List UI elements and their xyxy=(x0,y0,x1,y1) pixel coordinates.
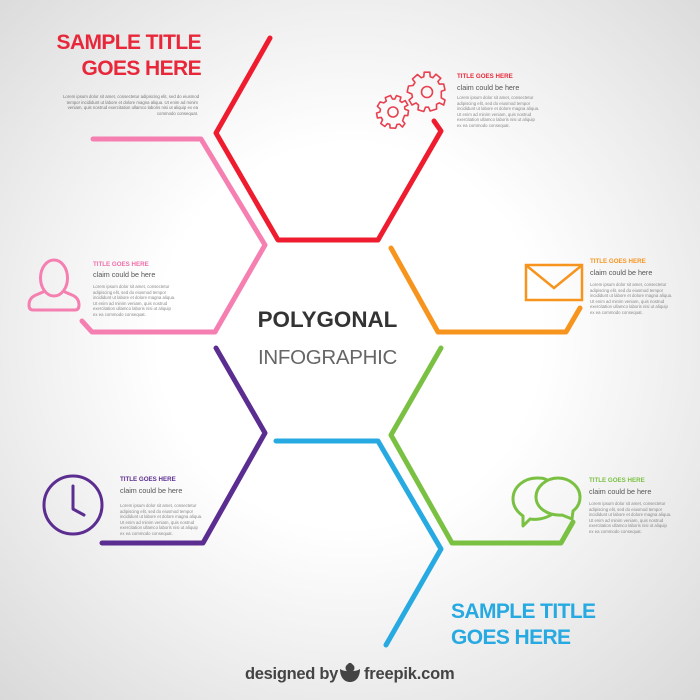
text: claim could be here xyxy=(590,268,652,277)
text: adipiscing elit, sed do eiusmod tempor xyxy=(457,101,530,106)
title: bottom right xyxy=(451,600,596,649)
text: claim could be here xyxy=(589,487,651,496)
text: Ut enim ad minim veniam, quis nostrud xyxy=(457,112,531,117)
text: incididunt ut labore et dolore magna aliqua. xyxy=(93,295,175,300)
text: ex ea commodo consequat. xyxy=(93,312,146,317)
text: ex ea commodo consequat. xyxy=(590,310,643,315)
title: bottom right: SAMPLE TITLE xyxy=(451,600,595,623)
text: exercitation ullamco laboris nisi ut aliquip xyxy=(457,117,535,122)
text: adipiscing elit, sed do eiusmod tempor xyxy=(93,290,166,295)
icon: gears xyxy=(372,72,445,133)
title: bottom right: GOES HERE xyxy=(451,626,570,649)
text block: top left lorem xyxy=(63,94,199,116)
icon: speech bubbles xyxy=(513,478,580,526)
text: Ut enim ad minim veniam, quis nostrud xyxy=(590,299,664,304)
text: claim could be here xyxy=(457,83,519,92)
text: adipiscing elit, sed do eiusmod tempor xyxy=(589,507,662,512)
pink polygon line xyxy=(82,139,265,332)
text: exercitation ullamco laboris nisi ut aliquip xyxy=(93,306,171,311)
text: Lorem ipsum dolor sit amet, consectetur xyxy=(93,284,169,289)
text: Lorem ipsum dolor sit amet, consectetur xyxy=(589,501,665,506)
red polygon line xyxy=(216,38,441,240)
icon: user xyxy=(29,260,79,310)
title: top left: SAMPLE TITLE xyxy=(57,31,201,54)
credit right: freepik.com xyxy=(364,665,454,683)
center subheading: INFOGRAPHIC xyxy=(258,346,397,369)
blue polygon line xyxy=(276,441,441,645)
text block: pink user xyxy=(93,261,175,317)
text: exercitation ullamco laboris nisi ut aliquip xyxy=(590,304,668,309)
text: incididunt ut labore et dolore magna aliqua. xyxy=(120,514,202,519)
text block: top left lorem: veniam, quis nostrud exercitation ullamco laboris nisi ut aliquip ex ea xyxy=(68,105,198,110)
text: Lorem ipsum dolor sit amet, consectetur xyxy=(590,282,666,287)
orange polygon line xyxy=(391,248,580,332)
text block: top left lorem: Lorem ipsum dolor sit amet, consectetur adipiscing elit, sed do eiusmod xyxy=(63,94,199,99)
text: Lorem ipsum dolor sit amet, consectetur xyxy=(120,503,196,508)
text: claim could be here xyxy=(93,270,155,279)
text: TITLE GOES HERE xyxy=(590,258,646,265)
text: adipiscing elit, sed do eiusmod tempor xyxy=(590,288,663,293)
text: ex ea commodo consequat. xyxy=(120,531,173,536)
text: TITLE GOES HERE xyxy=(457,73,513,80)
text: Ut enim ad minim veniam, quis nostrud xyxy=(589,518,663,523)
text block: orange envelope xyxy=(590,258,672,315)
center heading: POLYGONAL xyxy=(258,307,397,332)
text block: green speech xyxy=(589,477,671,534)
text: exercitation ullamco laboris nisi ut aliquip xyxy=(589,523,667,528)
text: incididunt ut labore et dolore magna aliqua. xyxy=(457,106,539,111)
text: incididunt ut labore et dolore magna aliqua. xyxy=(589,512,671,517)
icon: clock xyxy=(44,476,102,534)
text: incididunt ut labore et dolore magna aliqua. xyxy=(590,293,672,298)
text block: top left lorem: commodo consequat. xyxy=(157,111,198,116)
title: top left: GOES HERE xyxy=(82,57,201,80)
credit left: designed by xyxy=(245,665,338,683)
text: TITLE GOES HERE xyxy=(93,261,149,268)
text: ex ea commodo consequat. xyxy=(457,123,510,128)
icon: envelope xyxy=(526,265,582,300)
purple polygon line xyxy=(102,348,265,543)
text: Lorem ipsum dolor sit amet, consectetur xyxy=(457,95,533,100)
text block: top left lorem: tempor incididunt ut labore et dolore magna aliqua. Ut enim ad minim xyxy=(67,100,198,105)
text: exercitation ullamco laboris nisi ut aliquip xyxy=(120,525,198,530)
text block: purple clock xyxy=(120,476,202,536)
text: claim could be here xyxy=(120,486,182,495)
text: Ut enim ad minim veniam, quis nostrud xyxy=(93,301,167,306)
text: ex ea commodo consequat. xyxy=(589,529,642,534)
green polygon line xyxy=(391,348,573,543)
text: TITLE GOES HERE xyxy=(589,477,645,484)
text: Ut enim ad minim veniam, quis nostrud xyxy=(120,520,194,525)
icon: freepik logo xyxy=(340,663,360,682)
text: adipiscing elit, sed do eiusmod tempor xyxy=(120,509,193,514)
title: top left xyxy=(57,31,201,80)
text block: red gears xyxy=(457,73,539,128)
text: TITLE GOES HERE xyxy=(120,476,176,483)
